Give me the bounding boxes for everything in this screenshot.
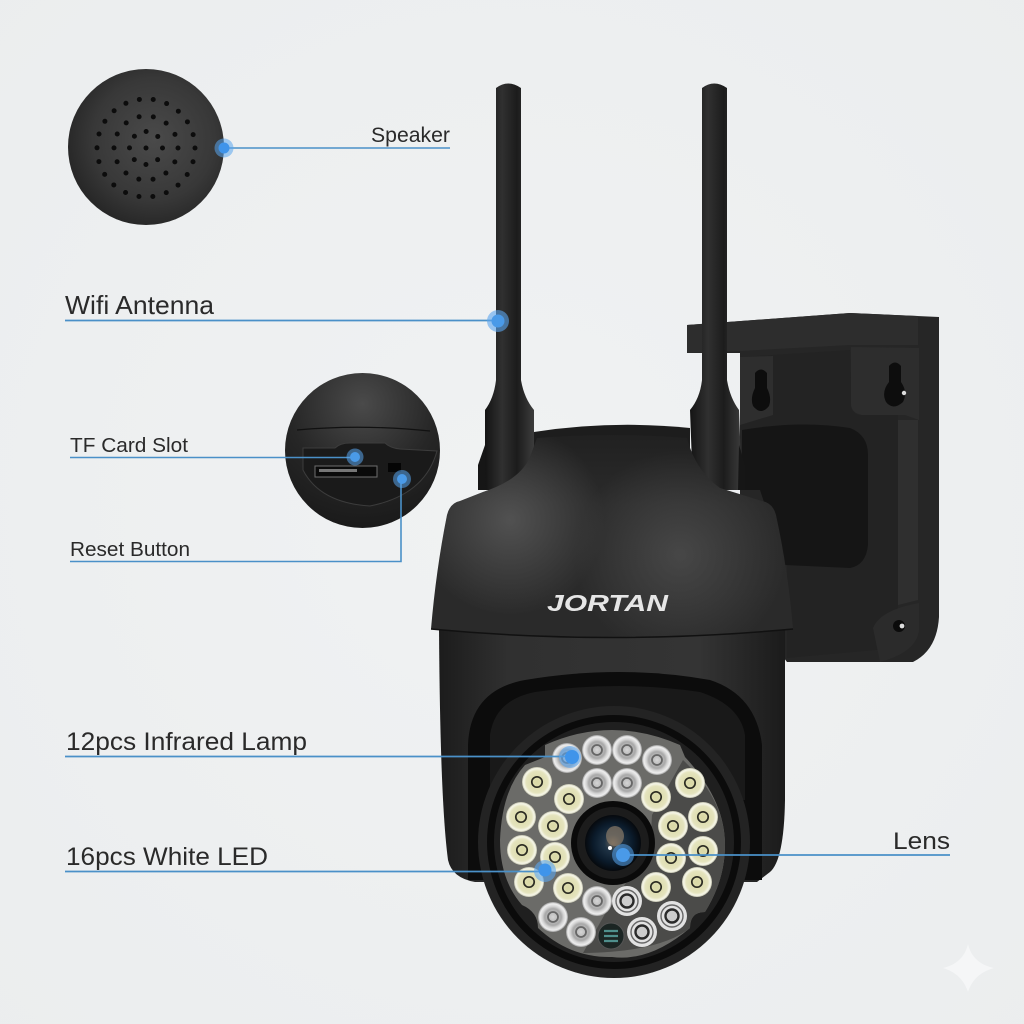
16pcs white LEDs [506,767,718,903]
bracket inner plate [740,350,898,658]
callout: infrared lamp: 12pcs Infrared Lamp [66,728,307,756]
callout: wifi antenna [65,290,509,332]
TF card slot [315,466,377,477]
callout: speaker: Speaker [371,124,450,147]
camera rear collar [534,425,690,470]
speaker holes [97,99,195,197]
screw hole lower [893,620,905,632]
camera front opening [468,672,762,880]
callout: wifi antenna: Wifi Antenna [65,290,215,320]
camera dome [431,438,786,636]
callout: reset button [70,470,411,562]
speaker inset [68,69,224,225]
callout: lens: Lens [893,828,950,855]
slot recess [303,443,437,506]
seam [297,427,430,431]
left antenna [478,84,534,490]
bracket arm [742,424,868,568]
brand logo: JORTAN [547,590,668,616]
keyhole right [884,362,905,406]
reset button hole [388,463,401,472]
callout: white LED: 16pcs White LED [66,843,268,871]
right antenna [690,84,745,490]
bracket back plate [687,313,939,662]
bracket right rail [898,420,918,605]
camera ball head [478,706,750,978]
callout: speaker [214,124,450,158]
LED board [500,730,725,958]
callout: infrared lamp [65,728,581,768]
camera lens [571,801,655,885]
TF card and reset inset [285,373,440,528]
light sensor [598,923,624,949]
bracket upper left tab [740,356,773,425]
12pcs infrared lamps [538,735,687,947]
callout: TF card slot [70,434,364,466]
keyhole left [752,370,770,411]
wall bracket [687,313,939,662]
bracket upper right tab [851,347,919,420]
callout: lens [612,828,950,866]
icon: sparkle watermark [943,944,994,992]
callout: TF card slot: TF Card Slot [70,434,188,457]
callout: white LED [65,843,556,882]
bracket top bar [687,313,918,353]
bracket lower tab [873,603,919,662]
camera lower body [439,625,785,882]
callout: reset button: Reset Button [70,538,190,561]
